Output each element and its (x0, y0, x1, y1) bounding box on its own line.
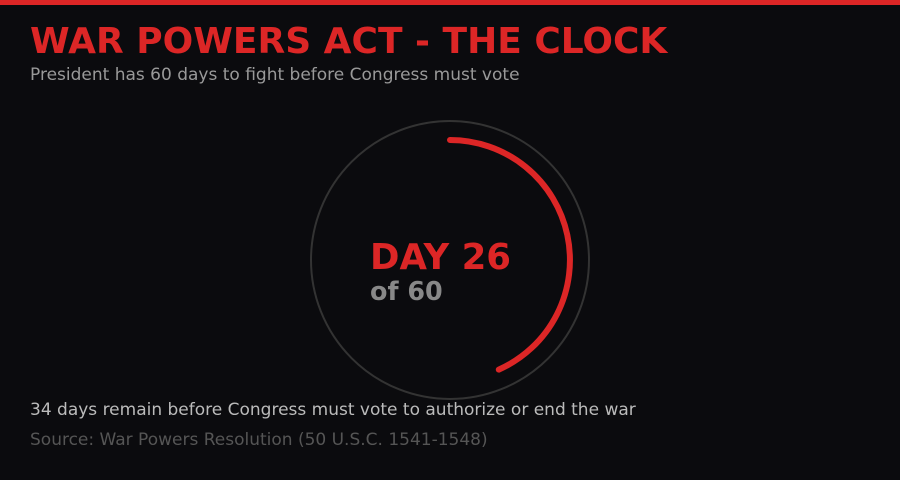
title: WAR POWERS ACT - THE CLOCK (30, 21, 667, 62)
subtitle: President has 60 days to fight before Congress must vote (30, 65, 520, 85)
day count: DAY 26 (370, 237, 511, 278)
progress arc: day 26 of 60 (450, 140, 570, 370)
top accent bar (0, 0, 900, 5)
source: Source: War Powers Resolution (50 U.S.C. 1541-1548) (30, 430, 488, 450)
remaining note: 34 days remain before Congress must vote to authorize or end the war (30, 400, 636, 420)
total days: of 60 (370, 276, 443, 306)
clock ring (311, 121, 589, 399)
